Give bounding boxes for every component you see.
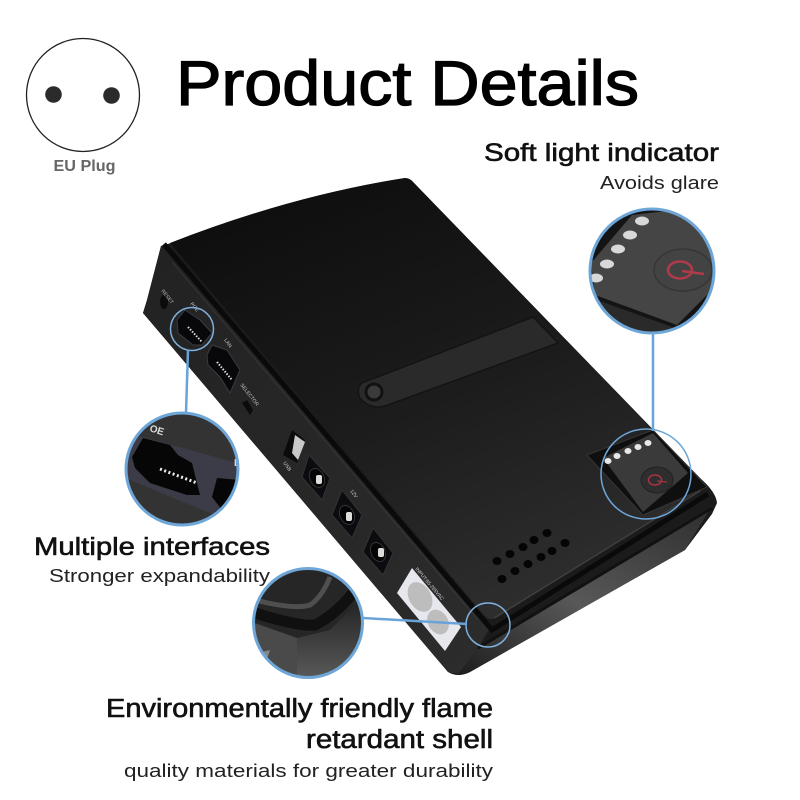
text: multiple interfaces: Multiple interfaces [34, 533, 270, 561]
5V port [302, 455, 330, 500]
text: multiple interfaces: Stronger expandability [49, 565, 271, 586]
callout: shell corner magnifier [252, 568, 365, 680]
icon: EU plug [26, 38, 140, 152]
callout: shell corner connector [363, 618, 467, 624]
callout: PoE connector [186, 350, 188, 413]
product: power station device: SELECTOR [238, 383, 260, 408]
product: power station device: POE [188, 301, 200, 314]
device top surface [170, 178, 703, 619]
device side panel [143, 246, 490, 674]
product: power station device: RESET [159, 289, 174, 305]
text: multiple interfaces [34, 533, 271, 586]
product: power station device [143, 178, 717, 675]
USB port [283, 430, 305, 463]
callout: shell corner small ring [466, 603, 510, 647]
text: flame retardant shell: Environmentally friendly flame [106, 695, 493, 723]
speaker vents [492, 529, 570, 583]
power button [641, 467, 673, 493]
device front lip [452, 506, 712, 674]
callout: PoE small ring [170, 308, 214, 350]
text: flame retardant shell: retardant shell [306, 726, 493, 754]
12V port [332, 490, 362, 538]
indicator panel [587, 430, 707, 515]
indicator lights [604, 440, 652, 464]
LAN port [207, 345, 240, 393]
strip button [366, 384, 382, 400]
AC input text: INPUT:85-265VAC [413, 566, 445, 602]
title: Product Details [176, 49, 639, 119]
selector switch [242, 400, 253, 415]
text: soft light indicator: Avoids glare [600, 172, 719, 193]
callout: PoE magnifier: OE [148, 423, 166, 438]
EU plug label: EU Plug [54, 158, 116, 175]
text: flame retardant shell [106, 695, 494, 781]
PoE port [177, 310, 212, 345]
product: power station device: USB [281, 461, 293, 473]
text: soft light indicator: Soft light indicator [484, 139, 719, 167]
text: flame retardant shell: quality materials for greater durability [124, 760, 494, 781]
product: power station device: LAN [222, 338, 233, 349]
device groove [164, 244, 708, 630]
callout: PoE magnifier [120, 413, 240, 530]
callout: indicator small ring [601, 429, 691, 519]
text: soft light indicator [484, 139, 719, 193]
callout: PoE magnifier: L [234, 458, 240, 469]
handle strip [358, 317, 558, 407]
callout: indicator connector [652, 333, 654, 431]
device body [143, 178, 717, 675]
reset port [160, 295, 168, 309]
AC inlet [397, 568, 461, 651]
product: power station device: 12V [348, 489, 359, 500]
callout: indicator magnifier [588, 205, 720, 340]
top highlight [494, 491, 700, 618]
9V port [363, 528, 393, 575]
